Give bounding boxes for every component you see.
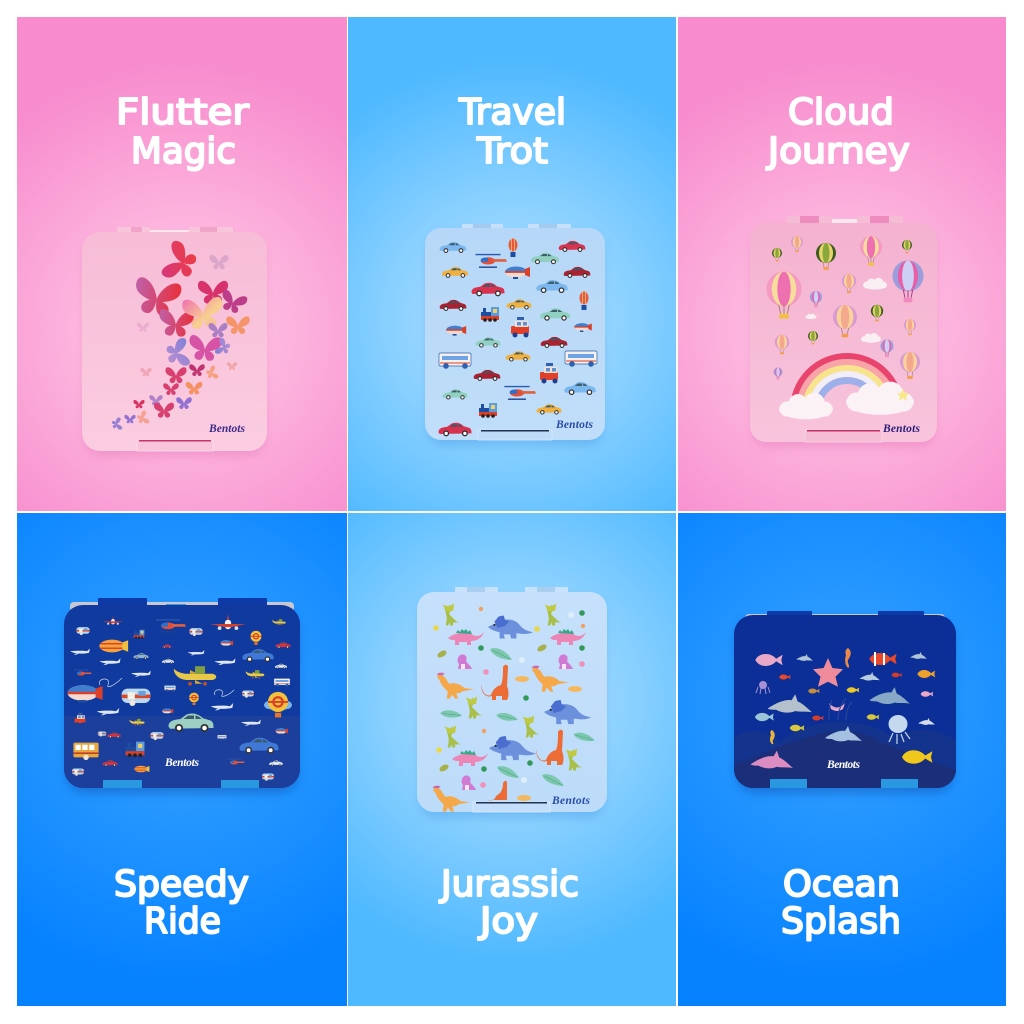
dinosaur pattern — [432, 603, 595, 812]
lunch box: Speedy Ride — [64, 598, 300, 793]
rainbow clouds — [779, 382, 914, 419]
title: Travel Trot: Travel — [458, 92, 566, 133]
panel: Speedy Ride — [17, 513, 347, 1006]
lunch box: Travel Trot — [425, 224, 605, 446]
rainbow — [793, 356, 901, 410]
latches — [770, 779, 918, 788]
panel: Cloud Journey — [678, 17, 1006, 511]
title: Ocean Splash: Splash — [781, 901, 901, 942]
vehicle pattern — [68, 614, 292, 781]
title: Travel Trot: Trot — [476, 131, 548, 172]
latch — [137, 440, 213, 451]
title: Jurassic Joy: Joy — [478, 901, 538, 942]
panel: Flutter Magic — [17, 17, 347, 511]
logo: Bentots: Bentots — [208, 423, 246, 435]
logo: Bentots: Bentots — [164, 757, 200, 769]
title: Flutter Magic — [116, 92, 249, 172]
panel: Jurassic Joy — [348, 513, 676, 1006]
vehicle pattern — [438, 238, 597, 436]
latch — [478, 430, 552, 440]
title: Travel Trot — [458, 92, 566, 172]
butterfly pattern — [111, 239, 250, 431]
lunch box: Jurassic Joy — [417, 587, 607, 818]
seabed silhouette — [734, 722, 956, 788]
logo: Bentots: Bentots — [826, 759, 861, 771]
title: Cloud Journey — [766, 92, 910, 172]
latch — [805, 430, 882, 442]
panel: Travel Trot — [348, 17, 676, 511]
title: Flutter Magic: Flutter — [116, 92, 249, 133]
sea creature pattern — [750, 648, 935, 768]
hot air balloon pattern — [766, 236, 924, 380]
panel: Ocean Splash — [678, 513, 1006, 1006]
title: Speedy Ride: Ride — [144, 901, 221, 942]
latches — [103, 780, 259, 788]
logo: Bentots: Bentots — [555, 419, 594, 431]
lunch box: Flutter Magic — [82, 227, 267, 456]
lunch box: Ocean Splash — [734, 611, 956, 793]
title: Cloud Journey: Cloud — [788, 92, 894, 133]
title: Speedy Ride: Speedy — [114, 864, 249, 905]
title: Ocean Splash: Ocean — [783, 864, 900, 905]
title: Flutter Magic: Magic — [131, 131, 236, 172]
title: Cloud Journey: Journey — [766, 131, 910, 172]
title: Speedy Ride — [114, 864, 249, 942]
title: Jurassic Joy: Jurassic — [439, 864, 579, 905]
title: Jurassic Joy — [439, 864, 579, 942]
latch — [473, 802, 550, 812]
title: Ocean Splash — [781, 864, 901, 942]
lunch box: Cloud Journey — [750, 216, 937, 447]
logo: Bentots: Bentots — [551, 795, 591, 807]
logo: Bentots: Bentots — [882, 423, 921, 435]
